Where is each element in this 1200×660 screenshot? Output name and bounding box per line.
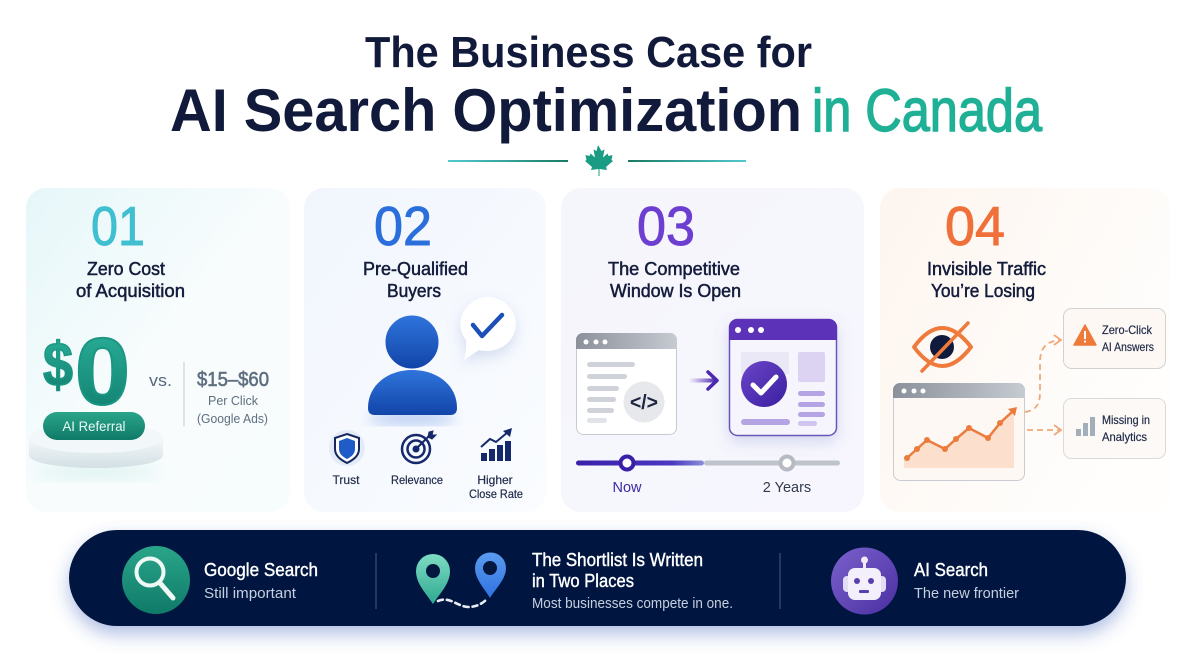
heading [363,259,468,301]
number 03: 03 [637,195,695,257]
heading: The Competitive [608,259,740,279]
Google Ads cost: $15–$60 [197,369,269,391]
icon: close rate chart [481,428,512,461]
after window with check [729,319,837,436]
callout: zero-click AI answers [1064,308,1166,368]
sublabel: The new frontier [914,585,1019,602]
sublabel: Still important [204,585,297,602]
title accent: in Canada [812,77,1043,144]
dollar zero: 0 [75,319,130,425]
heading: Invisible Traffic [927,259,1046,279]
heading [608,259,741,301]
number 01: 01 [91,195,145,257]
title line 1: The Business Case for [365,28,812,77]
before window with code [576,333,677,434]
vs label: vs. [149,371,172,390]
title [170,28,1043,144]
benefit labels: Higher [477,473,513,487]
bottom banner [69,530,1126,626]
number 02: 02 [374,195,432,257]
shortlist message [532,550,733,612]
heading: Buyers [387,281,441,301]
panel: invisible traffic [880,188,1170,512]
callout: missing in analytics [1064,398,1166,458]
heading: Pre-Qualified [363,259,468,279]
icon: check bubble [460,297,516,360]
Google Ads cost: Per Click [208,394,259,408]
icon: relevance target [402,431,436,463]
panel: competitive window [561,188,864,512]
traffic window chart [893,383,1025,480]
dashed connector to analytics [1027,425,1061,435]
dollar zero: $ [43,331,73,400]
heading [76,259,185,301]
AI Search group [831,548,1019,614]
shortlist message: in Two Places [532,571,634,591]
before window with code: </> [630,392,658,414]
shortlist message: Most businesses compete in one. [532,595,733,612]
number 04: 04 [945,195,1005,257]
heading: Zero Cost [87,259,165,279]
AI referral pill: AI Referral [62,418,126,434]
timeline: Now [612,480,642,496]
label: AI Search [914,560,988,580]
icon: crossed-out eye [914,323,971,371]
dollar zero [43,319,130,425]
benefit labels: Trust [333,473,360,487]
heading: of Acquisition [76,281,185,301]
icon: trust shield [329,430,365,466]
shortlist message: The Shortlist Is Written [532,550,703,570]
title line 2: AI Search Optimization [170,77,802,144]
heading [927,259,1046,301]
timeline: 2 Years [763,480,811,496]
timeline [576,456,840,496]
heading: You’re Losing [931,281,1035,301]
arrow [689,372,717,389]
AI referral pill [43,412,145,440]
label: Google Search [204,560,318,580]
callout: missing in analytics: Missing in [1102,413,1150,427]
callout: missing in analytics: Analytics [1102,430,1147,444]
callout: zero-click AI answers: AI Answers [1102,340,1154,354]
icon: robot [831,548,898,614]
icon: person [368,315,457,425]
icon: two map pins [416,552,506,607]
panel: pre-qualified buyers [304,188,546,512]
Google Search group [122,546,318,614]
heading: Window Is Open [610,281,741,301]
benefit labels: Close Rate [469,487,523,501]
Google Ads cost [197,369,269,426]
benefit labels: Relevance [391,473,443,487]
divider with maple leaf [448,145,746,176]
Google Ads cost: (Google Ads) [197,412,268,426]
icon: magnifier [122,546,190,614]
panel: zero cost of acquisition [26,188,290,512]
podium [29,423,163,481]
dashed connector to zero-click [1025,335,1061,412]
callout: zero-click AI answers: Zero-Click [1102,323,1153,337]
benefit labels [333,473,523,501]
